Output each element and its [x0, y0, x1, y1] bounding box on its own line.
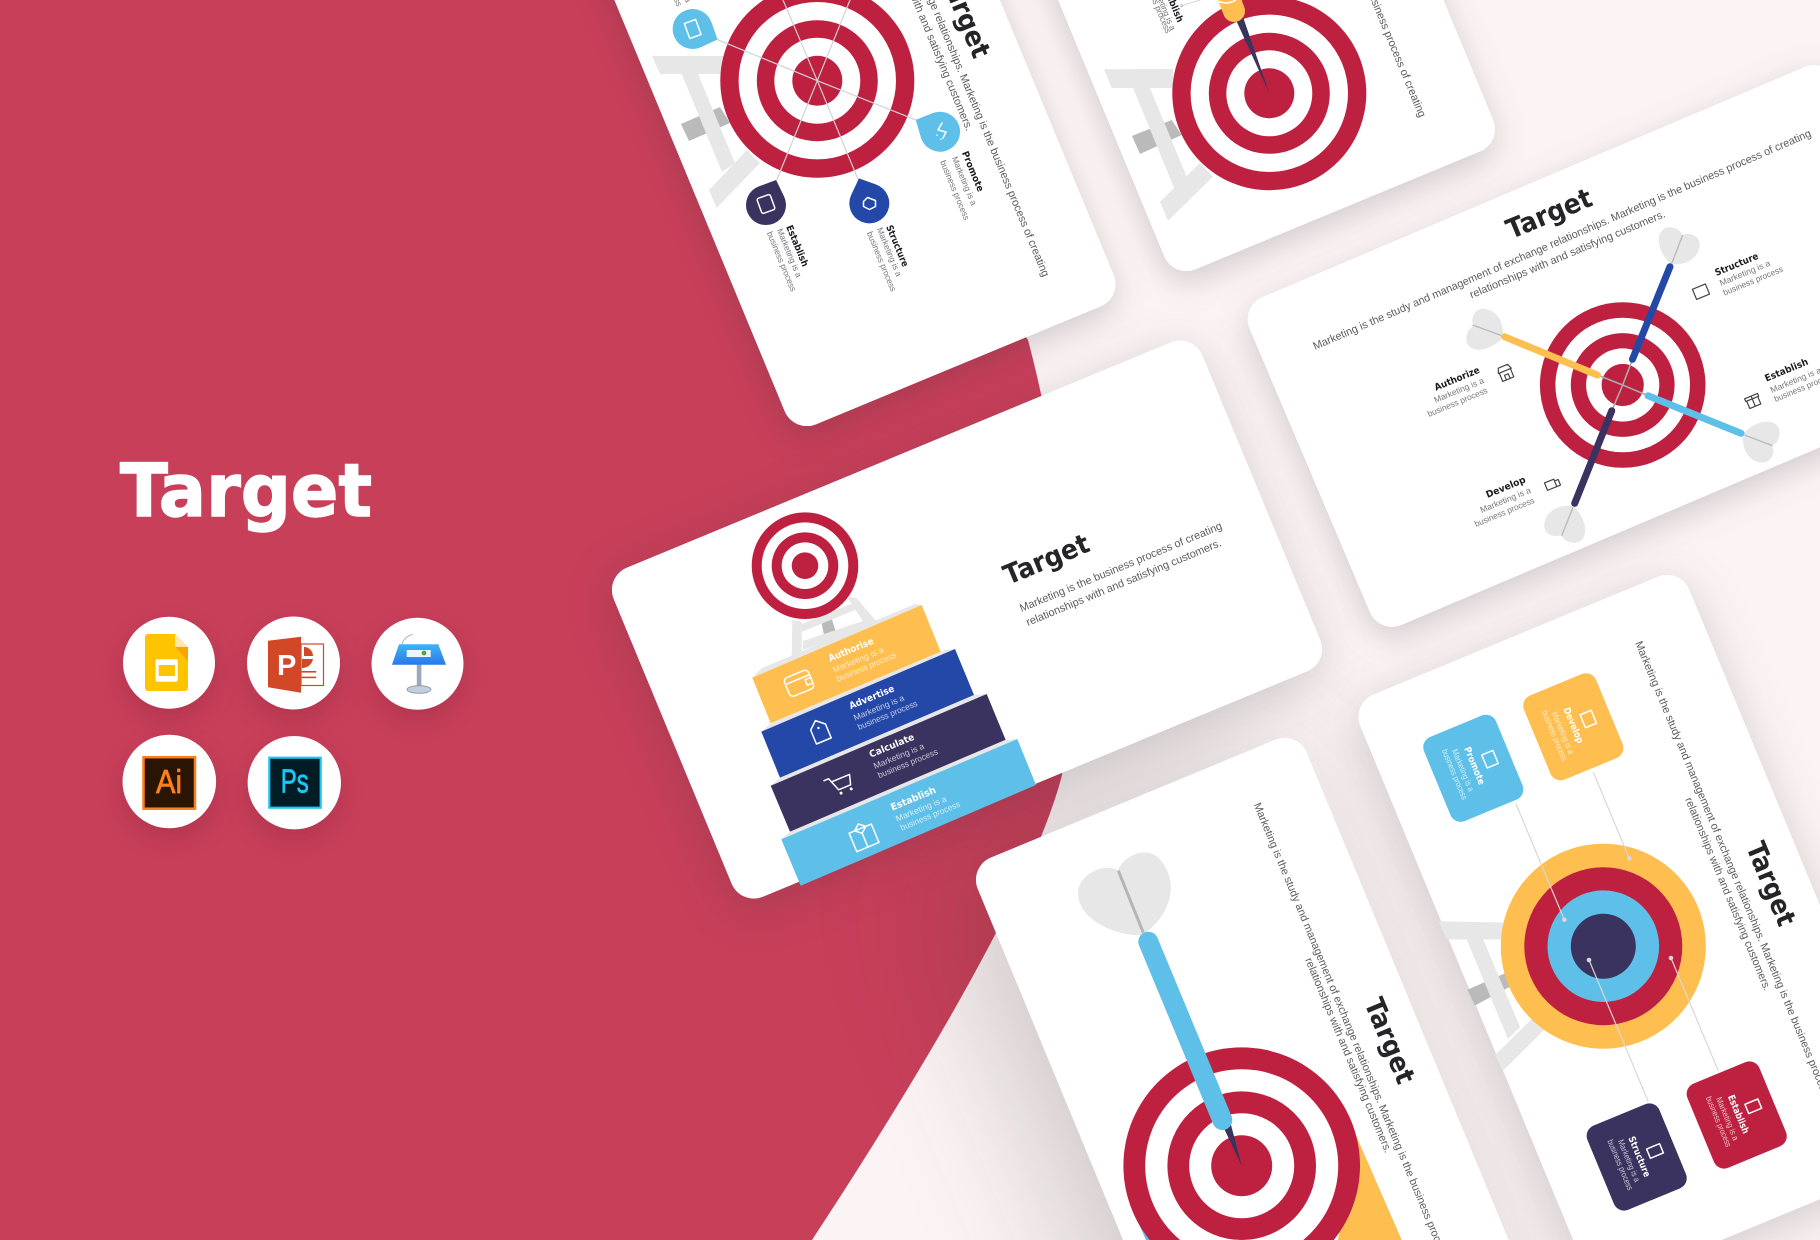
connector lines	[717, 0, 918, 180]
panel: slide with single dart and target	[930, 0, 1502, 278]
labels: promote, establish, structure	[651, 0, 986, 293]
label: establish: Marketing is a	[1769, 365, 1820, 395]
text: heading and description: Target	[1739, 837, 1802, 931]
step: advertise	[761, 649, 974, 778]
text: heading and description: Marketing is the study and management of exchange relationships. Marketing is the business process of creating	[1311, 128, 1813, 353]
step: establish: business process	[899, 799, 962, 833]
dart	[1216, 0, 1269, 93]
step: establish	[781, 739, 1036, 886]
dart: yellow	[1456, 303, 1623, 385]
labels: promote, establish, structure: Marketing is a	[875, 226, 904, 278]
label: authorize: business process	[1426, 385, 1489, 419]
colour bands behind target	[1138, 1133, 1402, 1240]
box: develop: business process	[1540, 709, 1570, 762]
step: establish: Marketing is a	[894, 794, 948, 824]
easel behind target	[652, 56, 760, 208]
label: structure: business process	[1721, 264, 1784, 298]
connector lines with dots	[1516, 772, 1718, 1102]
label: structure: Structure	[1713, 251, 1760, 279]
box: develop: Marketing is a	[1550, 710, 1576, 756]
target	[1172, 0, 1366, 190]
step: calculate: Calculate	[868, 732, 916, 760]
labels: promote, establish, structure: business process	[938, 159, 972, 222]
dart: light blue	[1623, 385, 1790, 468]
easel	[792, 597, 877, 657]
target	[720, 0, 914, 178]
target	[1540, 302, 1705, 468]
box: structure	[1583, 1100, 1690, 1214]
labels: promote, establish, structure: Marketing is a	[950, 155, 979, 207]
teardrop: top left	[666, 3, 725, 58]
text: heading and description: relationships with and satisfying customers.	[1025, 537, 1223, 629]
box: structure: business process	[1605, 1138, 1635, 1192]
panel: slide with large dart	[969, 731, 1541, 1240]
teardrop: promote	[907, 102, 967, 158]
label: structure: Marketing is a	[1718, 258, 1772, 288]
text: heading and description: Target	[1502, 183, 1597, 246]
step: authorise: Authorise	[827, 636, 875, 664]
step: authorise: business process	[835, 650, 898, 684]
box: establish: Establish	[1725, 1093, 1751, 1136]
panel: slide with four darts	[1240, 58, 1820, 634]
icon: keynote	[372, 618, 464, 710]
dart	[1078, 853, 1242, 1166]
label: develop: business process	[1473, 495, 1536, 529]
card shadows layer	[550, 0, 1820, 1240]
labels: promote, establish, structure: Establish	[783, 224, 810, 269]
box: promote: Marketing is a	[1450, 747, 1476, 793]
step: calculate: Marketing is a	[872, 741, 926, 771]
label: develop: Marketing is a	[1479, 485, 1532, 515]
teardrop: structure	[841, 171, 895, 229]
icon: powerpoint: P	[277, 650, 296, 682]
box: promote: Promote	[1461, 745, 1487, 787]
concentric circles	[1501, 844, 1706, 1049]
label: authorize: Authorize	[1433, 365, 1481, 393]
labels: promote, establish, structure: Promote	[959, 150, 986, 194]
labels: promote, establish, structure: business process	[865, 230, 899, 293]
text: heading and description: Target	[1358, 994, 1421, 1089]
label: authorize	[1426, 364, 1515, 419]
background: crimson curved shape	[0, 0, 1071, 1240]
icon: illustrator: Ai	[156, 763, 182, 800]
labels: promote, establish, structure: Structure	[883, 224, 910, 268]
step: calculate: business process	[876, 746, 939, 780]
labels: promote, establish, structure: Marketing is a	[775, 227, 804, 279]
label: develop: Develop	[1484, 474, 1528, 501]
box: structure: Structure	[1626, 1135, 1652, 1179]
box: develop	[1520, 670, 1627, 784]
dart: blue	[1623, 217, 1705, 385]
step: calculate	[771, 694, 1006, 832]
icon: photoshop	[248, 736, 341, 829]
panel: slide with staircase	[605, 333, 1329, 906]
icon: google slides	[123, 617, 215, 709]
text: heading and description: relationships with and satisfying customers.	[1302, 956, 1394, 1155]
step: advertise: business process	[856, 698, 919, 732]
label: structure	[1692, 251, 1784, 299]
box: establish	[1683, 1058, 1790, 1172]
box: establish: Marketing is a	[1714, 1095, 1741, 1142]
step: authorise	[752, 604, 941, 723]
text: heading and description: relationships with and satisfying customers.	[1468, 208, 1667, 301]
box: promote	[1420, 711, 1527, 825]
icon: illustrator	[122, 735, 216, 828]
teardrop: establish	[740, 172, 795, 231]
target	[752, 512, 858, 619]
panel: slide with target and teardrop markers	[550, 0, 1123, 433]
icon: photoshop: Ps	[281, 763, 309, 800]
step: establish: Establish	[889, 785, 938, 813]
box: structure: Marketing is a	[1616, 1138, 1642, 1184]
label: develop	[1473, 474, 1560, 529]
box: establish: business process	[1704, 1095, 1734, 1148]
labels: promote, establish, structure: business process	[765, 230, 799, 293]
dart: navy	[1539, 385, 1623, 553]
software icons	[122, 616, 464, 829]
panel: slide with concentric circles and boxes	[1351, 568, 1820, 1240]
step: authorise: Marketing is a	[831, 645, 885, 675]
label: establish	[1140, 0, 1200, 35]
box: promote: business process	[1440, 747, 1470, 801]
label: establish: Establish	[1763, 357, 1810, 384]
text: heading and description: relationships with and satisfying customers.	[1682, 796, 1773, 993]
step: advertise: Advertise	[848, 684, 896, 712]
label: establish	[1745, 357, 1820, 409]
text: heading and description: Target	[999, 528, 1094, 591]
icon: powerpoint	[247, 616, 340, 710]
easel	[1438, 921, 1545, 1071]
target	[1123, 1047, 1360, 1240]
easel behind target	[1104, 69, 1213, 221]
text: heading and description: Marketing is the business process of creating	[1018, 520, 1224, 615]
label: authorize: Marketing is a	[1432, 375, 1485, 405]
step: advertise: Marketing is a	[852, 693, 906, 723]
main title: Target	[120, 449, 372, 534]
box: develop: Develop	[1561, 706, 1585, 745]
